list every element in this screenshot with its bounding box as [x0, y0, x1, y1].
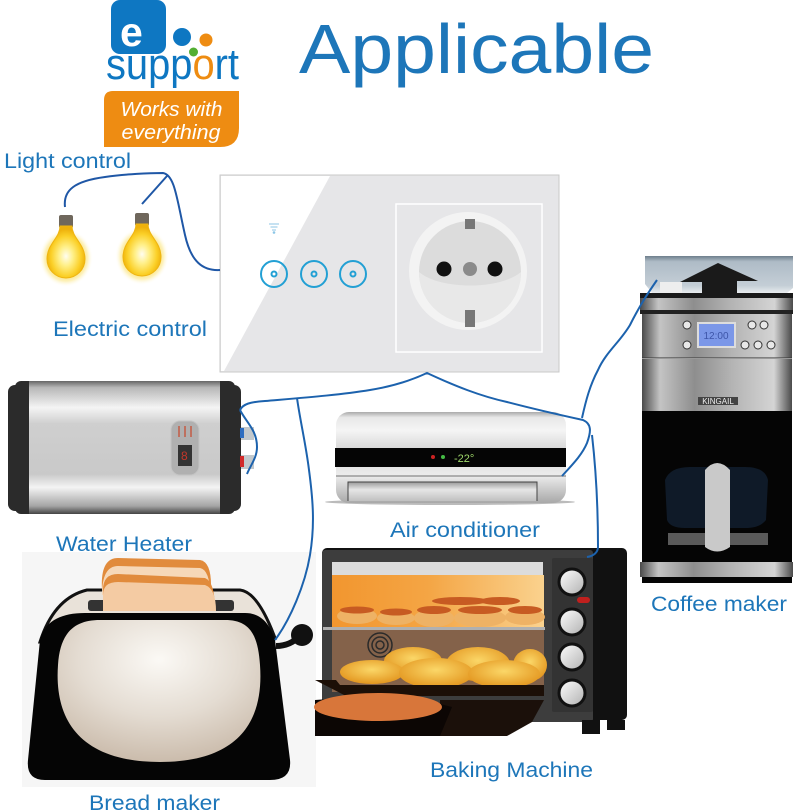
black body — [642, 411, 792, 583]
feet — [582, 720, 625, 734]
heater display: 8 — [181, 449, 188, 463]
touch button 3 — [340, 261, 366, 287]
label: coffee maker: Coffee maker — [651, 593, 787, 616]
icon: right bulb — [115, 213, 169, 285]
indicator — [577, 597, 590, 603]
socket frame — [396, 204, 542, 352]
light wires — [65, 173, 220, 270]
appliance: coffee maker — [640, 256, 793, 583]
appliance: toaster — [22, 552, 316, 787]
oven lower cavity — [332, 630, 544, 692]
heater display — [171, 421, 199, 475]
label: air conditioner: Air conditioner — [390, 519, 540, 542]
bun toppings — [340, 597, 542, 616]
oven upper cavity — [332, 575, 544, 628]
brand: KINGAIL — [702, 397, 734, 406]
bean hopper — [645, 256, 793, 293]
control knobs — [683, 321, 775, 349]
label: water heater: Water Heater — [56, 533, 192, 556]
toast slices — [102, 558, 216, 611]
control panel — [552, 558, 593, 712]
appliance wires — [240, 280, 657, 640]
icon: wifi — [269, 224, 279, 233]
touch button 2 — [301, 261, 327, 287]
oven knobs — [559, 569, 585, 706]
appliance: air conditioner: -22° — [454, 453, 474, 465]
open door — [440, 700, 544, 736]
label: baking machine: Baking Machine — [430, 759, 593, 782]
badge: works with everything: everything — [122, 122, 220, 144]
label: light control: Light control — [4, 150, 131, 173]
toaster top — [40, 590, 275, 642]
appliance: air conditioner — [325, 412, 575, 505]
pizza — [315, 694, 452, 736]
icon: coloured dots — [173, 28, 212, 56]
toaster body — [28, 613, 290, 780]
touch button 1 — [261, 261, 287, 287]
logo: eSupport — [106, 0, 239, 89]
panel: smart switch socket — [220, 175, 559, 372]
fan — [368, 633, 392, 657]
appliance: coffee maker: 12:00 — [703, 331, 729, 342]
rack buns — [337, 608, 545, 627]
heater pipes — [240, 427, 254, 469]
icon: left bulb — [39, 215, 93, 287]
socket — [409, 212, 527, 330]
appliance: water heater — [8, 381, 254, 514]
icon: e tile: e — [120, 9, 143, 55]
base — [640, 562, 793, 577]
appliance: oven — [314, 548, 627, 736]
logo wordmark: support — [106, 40, 239, 89]
badge: works with everything: Works with — [120, 99, 222, 121]
lcd — [698, 323, 735, 347]
badge: works with everything — [104, 91, 239, 147]
panel reflection — [221, 176, 330, 371]
lower buns — [340, 647, 547, 688]
machine top — [640, 293, 793, 298]
carafe — [665, 467, 768, 528]
title: Applicable — [299, 10, 654, 88]
lever — [276, 637, 298, 646]
label: electric control: Electric control — [53, 318, 207, 341]
